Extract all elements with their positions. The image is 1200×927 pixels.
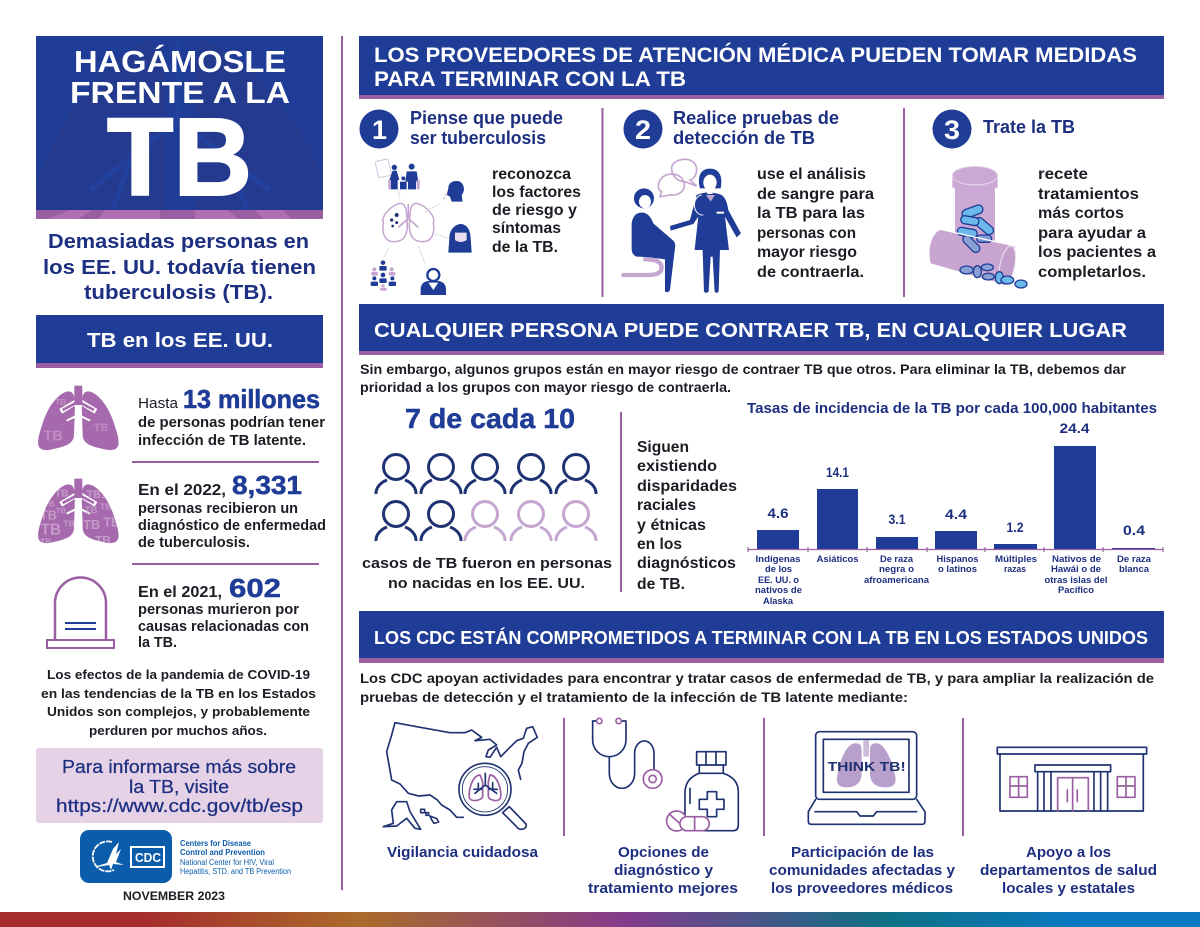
callout: more information (36, 748, 323, 823)
category labels: nativos de (755, 585, 802, 596)
text block: COVID-19 effects (41, 667, 316, 738)
stat: 13 millones: de personas podrían tener (138, 415, 325, 431)
background lungs (36, 40, 323, 219)
step 1 text: de la TB. (492, 239, 558, 256)
category labels: Asiáticos (816, 554, 858, 565)
step 2 text: use el análisis (757, 166, 866, 183)
step 1 heading: ser tuberculosis (410, 128, 546, 148)
stat: 602: personas murieron por (138, 602, 299, 618)
logo: CDC: Control and Prevention (180, 848, 265, 857)
text block: COVID-19 effects: Unidos son complejos, y probablemente (47, 704, 310, 719)
step 1 text: síntomas (492, 220, 561, 237)
pictogram: 7 of 10 people (376, 454, 596, 541)
stat: 13 millones: infección de TB latente. (138, 433, 306, 449)
icon: patient and doctor (623, 159, 741, 293)
subtitle: Demasiadas personas en (48, 231, 309, 253)
icon: lungs with TB disease: TB (40, 537, 52, 547)
icon: tombstone (47, 578, 114, 648)
icon: health department building (997, 747, 1147, 811)
title text: FRENTE A LA (70, 75, 290, 110)
category labels: blanca (1119, 564, 1150, 575)
title text (70, 44, 290, 219)
panel: step 1 (360, 108, 581, 295)
step 3 text: para ayudar a (1038, 225, 1146, 242)
title text: TB (107, 96, 252, 219)
icon: pill bottles (929, 166, 1027, 288)
step 2 text: personas con (757, 225, 856, 242)
number badge 2 (624, 110, 662, 148)
stat: 602 (138, 573, 309, 651)
number badge 3: 3 (944, 115, 960, 145)
panel: surveillance (383, 723, 539, 861)
category labels: de los (765, 564, 792, 575)
caption: non US-born: no nacidas en los EE. UU. (388, 575, 585, 592)
values (768, 420, 1145, 538)
category labels: De raza (880, 554, 914, 565)
logo: CDC: Hepatitis, STD, and TB Prevention (180, 867, 291, 876)
values: 1.2 (1006, 519, 1024, 535)
stat: 8,331: diagnóstico de enfermedad (138, 518, 326, 534)
panel: step 3 (929, 110, 1156, 288)
caption: tratamiento mejores (588, 880, 738, 897)
logo: CDC: Centers for Disease (180, 839, 252, 848)
icon: lungs with latent TB: TB (43, 429, 63, 445)
step 2 heading: detección de TB (673, 128, 815, 148)
caption (980, 844, 1157, 897)
text block: priority groups: prioridad a los grupos con mayor riesgo de contraerla. (360, 380, 731, 395)
stat: 602: causas relacionadas con (138, 619, 309, 635)
text block: disparities: existiendo (637, 458, 717, 475)
text block: COVID-19 effects: perduren por muchos años. (89, 723, 267, 738)
stat: 8,331 (138, 470, 326, 551)
icon: lungs with latent TB: TB (55, 397, 67, 407)
caption: Apoyo a los (1026, 844, 1111, 861)
caption: diagnóstico y (614, 862, 714, 879)
text block: COVID-19 effects: Los efectos de la pandemia de COVID-19 (47, 667, 310, 682)
number badge 1 (360, 110, 398, 148)
heading: providers: LOS PROVEEDORES DE ATENCIÓN MÉDICA PUEDEN TOMAR MEDIDAS (374, 43, 1137, 67)
subtitle (43, 231, 316, 304)
number badge 1: 1 (372, 115, 387, 145)
icon: lungs with TB disease (38, 479, 120, 548)
caption: non US-born (362, 555, 612, 592)
text block: priority groups (360, 362, 1127, 395)
text block: disparities: de TB. (637, 576, 685, 593)
values: 14.1 (826, 464, 849, 480)
panel: community engagement (769, 732, 956, 897)
icon: lungs with TB disease: TB (55, 488, 68, 499)
category labels: Hawái o de (1051, 564, 1101, 575)
caption: non US-born: casos de TB fueron en personas (362, 555, 612, 572)
icon: lungs with TB disease: TB (40, 509, 57, 523)
step 2 heading (673, 108, 839, 148)
stat: 13 millones (138, 384, 325, 449)
stat: 13 millones: Hasta (138, 396, 179, 412)
stat: 8,331: personas recibieron un (138, 501, 298, 517)
caption: Vigilancia cuidadosa (387, 844, 539, 861)
caption (588, 844, 738, 897)
category labels: Alaska (763, 596, 794, 607)
caption: los proveedores médicos (771, 880, 953, 897)
category labels: Hispanos (936, 554, 978, 565)
icon: lungs with TB disease: TB (56, 506, 66, 515)
icon: lungs with TB disease: TB (63, 518, 75, 528)
column divider (341, 36, 343, 890)
stat: 8,331: de tuberculosis. (138, 535, 250, 551)
title text: HAGÁMOSLE (74, 44, 286, 79)
category labels: afroamericana (864, 575, 930, 586)
caption: departamentos de salud (980, 862, 1157, 879)
bar chart: TB incidence (747, 401, 1163, 607)
caption (769, 844, 956, 897)
stat: 602: En el 2021, (138, 584, 222, 601)
category labels: De raza (1117, 554, 1152, 565)
step 2 text (757, 166, 874, 281)
icon: laptop: THINK TB! (828, 759, 906, 774)
icon: lungs with TB disease: TB1 (87, 489, 107, 501)
stat: 7 de cada 10: 7 de cada 10 (405, 403, 575, 434)
category labels: razas (1004, 564, 1026, 575)
text block: COVID-19 effects: en las tendencias de la TB en los Estados (41, 686, 316, 701)
icon: lungs with TB disease: TB (85, 505, 98, 515)
icon: lungs with TB disease: TB (103, 515, 120, 529)
category labels: Pacífico (1058, 585, 1094, 596)
category labels (755, 554, 1152, 607)
axis (748, 547, 1163, 552)
heading: CDC committed: LOS CDC ESTÁN COMPROMETIDOS A TERMINAR CON LA TB EN LOS ESTADOS UNIDOS (374, 627, 1148, 648)
values: 4.6 (768, 505, 789, 521)
values: 4.4 (945, 506, 967, 522)
text block: CDC activities: Los CDC apoyan actividades para encontrar y tratar casos de enfermedad de TB, y para ampliar la realización de (360, 671, 1155, 686)
heading: providers (359, 36, 1164, 99)
step 1 heading: Piense que puede (410, 108, 563, 128)
stat: 602: 602 (229, 573, 281, 603)
heading: TB en los EE. UU. (36, 315, 323, 368)
heading: providers: PARA TERMINAR CON LA TB (374, 68, 686, 91)
logo: CDC (80, 830, 291, 883)
category labels: Múltiples (995, 554, 1037, 565)
step 2 text: de contraerla. (757, 264, 864, 281)
category labels: Indígenas (756, 554, 800, 565)
category labels: EE. UU. o (758, 575, 799, 586)
subtitle: tuberculosis (TB). (84, 282, 273, 304)
step 3 text: tratamientos (1038, 186, 1139, 203)
step 1 text: los factores (492, 184, 581, 201)
step 1 text: reconozca (492, 166, 571, 183)
panel: health departments (980, 747, 1157, 897)
step 1 text: de riesgo y (492, 202, 577, 219)
icon: US map with magnifier (383, 723, 537, 829)
text block: disparities: Siguen (637, 439, 689, 456)
values: 24.4 (1060, 420, 1090, 436)
icon: stethoscope and medicine bottle (593, 718, 738, 831)
icon: risk factors network (371, 159, 472, 295)
values: 3.1 (888, 511, 906, 527)
heading: anyone can get TB (359, 304, 1164, 355)
stat: 8,331: 8,331 (232, 470, 302, 500)
step 2 text: de sangre para (757, 186, 874, 203)
callout: more information: https://www.cdc.gov/tb/esp (56, 796, 303, 816)
panel: step 2 (623, 108, 874, 293)
values: 0.4 (1123, 522, 1145, 538)
text block: CDC activities (360, 671, 1155, 705)
step 3 text: más cortos (1038, 205, 1124, 222)
heading: anyone can get TB: CUALQUIER PERSONA PUEDE CONTRAER TB, EN CUALQUIER LUGAR (374, 319, 1127, 342)
chart title: Tasas de incidencia de la TB por cada 100,000 habitantes (747, 401, 1157, 417)
caption: comunidades afectadas y (769, 862, 956, 879)
text block: priority groups: Sin embargo, algunos grupos están en mayor riesgo de contraer TB que otros. Para eliminar la TB, debemos dar (360, 362, 1127, 377)
icon: lungs with TB disease: TB (95, 534, 111, 548)
icon: lungs with latent TB (38, 386, 119, 450)
stat: 602: la TB. (138, 635, 177, 651)
bars (757, 446, 1155, 550)
icon: lungs with TB disease: TB (41, 522, 61, 539)
logo: CDC: CDC (135, 850, 162, 865)
heading: TB en los EE. UU.: TB en los EE. UU. (87, 330, 273, 352)
text block: disparities: en los (637, 536, 682, 553)
text block: disparities (637, 439, 737, 593)
caption: Opciones de (618, 844, 709, 861)
category labels: o latinos (938, 564, 977, 575)
step 3 text: completarlos. (1038, 264, 1146, 281)
category labels: negra o (879, 564, 914, 575)
callout: more information: Para informarse más sobre (62, 757, 296, 777)
step 2 text: mayor riesgo (757, 244, 857, 261)
caption: locales y estatales (1002, 880, 1135, 897)
caption: Participación de las (791, 844, 934, 861)
heading: CDC committed (359, 611, 1164, 663)
text block: disparities: raciales (637, 497, 696, 514)
category labels: Nativos de (1052, 554, 1101, 565)
icon: laptop (808, 732, 925, 824)
subtitle: los EE. UU. todavía tienen (43, 257, 316, 279)
category labels: otras islas del (1044, 575, 1108, 586)
step 3 text: recete (1038, 166, 1088, 183)
step 3 text (1038, 166, 1156, 281)
stat: 8,331: En el 2022, (138, 482, 226, 499)
text block: disparities: diagnósticos (637, 555, 736, 572)
step 1 heading (410, 108, 563, 148)
panel: diagnosis and treatment (588, 718, 738, 897)
number badge 2: 2 (635, 115, 651, 145)
text block: disparities: disparidades (637, 478, 737, 495)
panel: title banner (36, 36, 323, 219)
text block: disparities: y étnicas (637, 517, 706, 534)
stat: 13 millones: 13 millones (183, 384, 320, 414)
footer gradient bar (0, 912, 1200, 927)
date: NOVEMBER 2023 (123, 891, 225, 903)
step 2 heading: Realice pruebas de (673, 108, 839, 128)
step 1 text (492, 166, 581, 256)
step 2 text: la TB para las (757, 205, 865, 222)
icon: lungs with TB disease: B (48, 498, 55, 508)
icon: lungs with TB disease: TB (100, 502, 112, 512)
logo: CDC: National Center for HIV, Viral (180, 858, 274, 867)
icon: lungs with TB disease: TB (83, 518, 100, 532)
step 3 text: los pacientes a (1038, 244, 1156, 261)
step 3 heading: Trate la TB (983, 117, 1075, 137)
callout: more information: la TB, visite (129, 777, 229, 797)
icon: lungs with latent TB: TB (94, 422, 109, 434)
text block: CDC activities: pruebas de detección y el tratamiento de la infección de TB latente mediante: (360, 690, 908, 705)
number badge 3 (932, 110, 972, 148)
